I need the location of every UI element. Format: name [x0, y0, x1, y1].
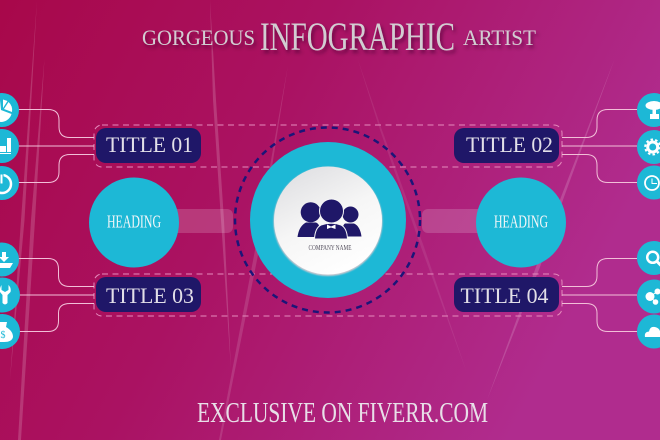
heading circle left: HEADING — [107, 212, 161, 232]
title box 04 — [454, 277, 559, 312]
title box 02: TITLE 02 — [466, 132, 553, 157]
icon: wrench — [0, 278, 20, 312]
icon: network nodes — [637, 280, 660, 314]
heading circle right — [476, 178, 566, 268]
title box 01 — [96, 128, 201, 163]
connectors: right bottom — [562, 258, 637, 332]
icon: clock — [637, 166, 660, 200]
title: GORGEOUS — [142, 25, 255, 50]
icon: download tray — [0, 242, 19, 276]
link band: right heading to centre — [422, 209, 485, 233]
central white plate — [274, 166, 382, 276]
dashed frame: bottom row — [94, 274, 562, 316]
icon: bar chart — [0, 129, 19, 163]
central dashed ring — [235, 128, 420, 312]
title: INFOGRAPHIC — [260, 14, 455, 59]
dashed frame: top row — [94, 125, 562, 167]
icon: power gauge — [0, 166, 19, 200]
company name: COMPANY NAME — [308, 245, 352, 252]
heading circle left — [89, 178, 179, 268]
icon: company people — [298, 199, 362, 239]
icon: magnifier — [637, 241, 660, 275]
connectors: left top — [18, 110, 94, 182]
title box 04: TITLE 04 — [460, 283, 548, 308]
heading circle right: HEADING — [494, 212, 548, 232]
icon: money bag — [0, 314, 20, 349]
title box 02 — [454, 128, 559, 163]
title: ARTIST — [463, 25, 537, 50]
link band: left heading to centre — [170, 209, 233, 233]
icon: trophy — [637, 93, 660, 127]
title box 01: TITLE 01 — [106, 132, 193, 157]
title box 03: TITLE 03 — [106, 283, 194, 308]
connectors: right top — [562, 110, 637, 182]
central teal ring — [250, 142, 406, 298]
footer text: EXCLUSIVE ON FIVERR.COM — [197, 397, 488, 429]
connectors: left bottom — [18, 258, 94, 332]
title box 03 — [96, 277, 201, 312]
icon: money bag: $ — [0, 330, 6, 341]
title — [142, 14, 537, 59]
icon: pie chart — [0, 93, 19, 127]
icon: gear — [637, 130, 660, 164]
icon: cloud — [637, 314, 660, 348]
